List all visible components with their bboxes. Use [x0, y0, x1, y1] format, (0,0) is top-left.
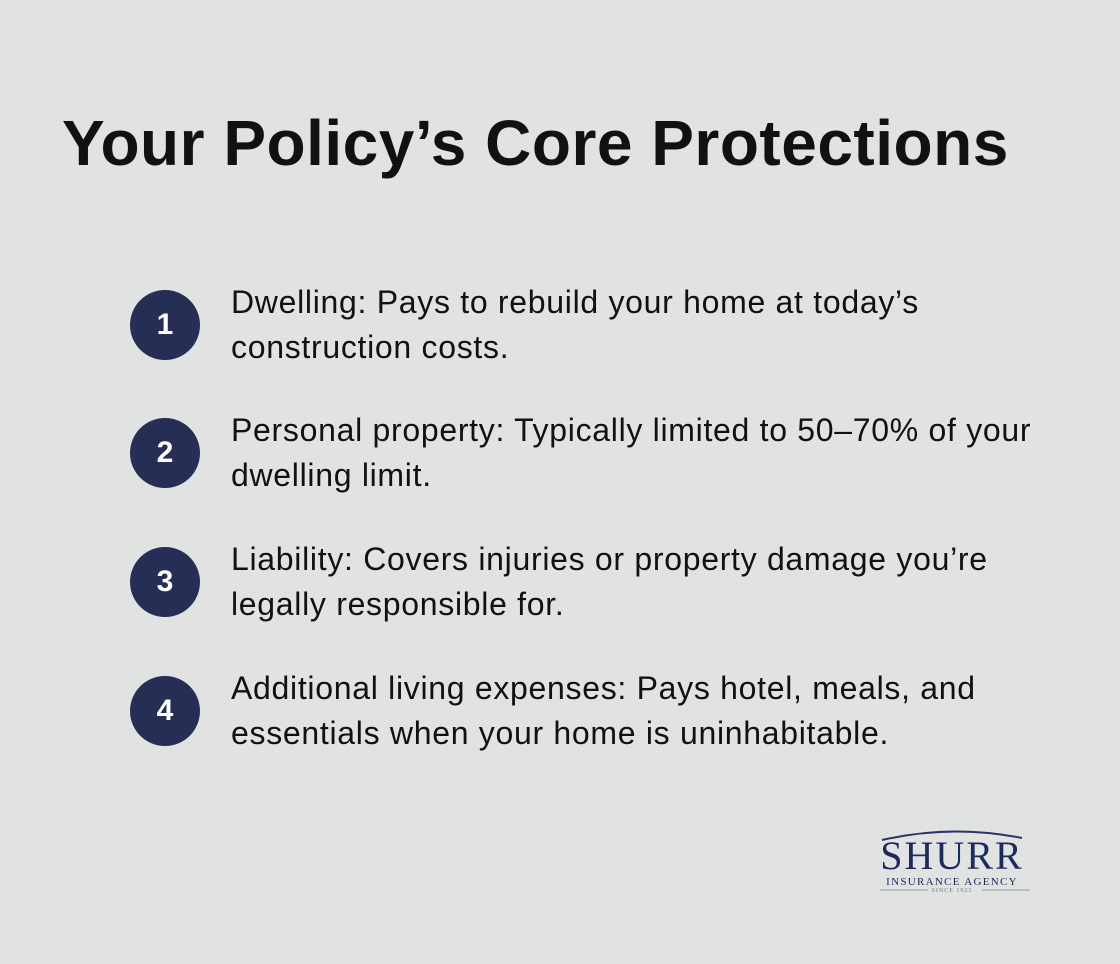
item 2	[130, 412, 1031, 493]
text 1: Dwelling: Pays to rebuild your home at today’s	[231, 284, 919, 320]
item 4	[130, 670, 976, 751]
text 2: dwelling limit.	[231, 457, 432, 493]
number 2	[130, 418, 200, 488]
number 3: 3	[157, 565, 173, 598]
text 4: Additional living expenses: Pays hotel, meals, and	[231, 670, 976, 706]
number 4: 4	[157, 694, 173, 727]
text 1	[231, 284, 919, 365]
logo: SHURR	[880, 833, 1024, 878]
text 4: essentials when your home is uninhabitable.	[231, 715, 889, 751]
title: Your Policy’s Core Protections	[62, 107, 1009, 179]
text 3: Liability: Covers injuries or property damage you’re	[231, 541, 988, 577]
item 3	[130, 541, 988, 622]
number 2: 2	[157, 436, 173, 469]
text 2	[231, 412, 1031, 493]
number 1	[130, 290, 200, 360]
number 4	[130, 676, 200, 746]
number 1: 1	[157, 308, 173, 341]
text 4	[231, 670, 976, 751]
text 3	[231, 541, 988, 622]
text 1: construction costs.	[231, 329, 509, 365]
logo: INSURANCE AGENCY	[886, 876, 1018, 888]
logo	[880, 830, 1030, 894]
item 1	[130, 284, 919, 365]
text 3: legally responsible for.	[231, 586, 564, 622]
text 2: Personal property: Typically limited to 50–70% of your	[231, 412, 1031, 448]
logo: SINCE 1923	[932, 888, 972, 894]
number 3	[130, 547, 200, 617]
